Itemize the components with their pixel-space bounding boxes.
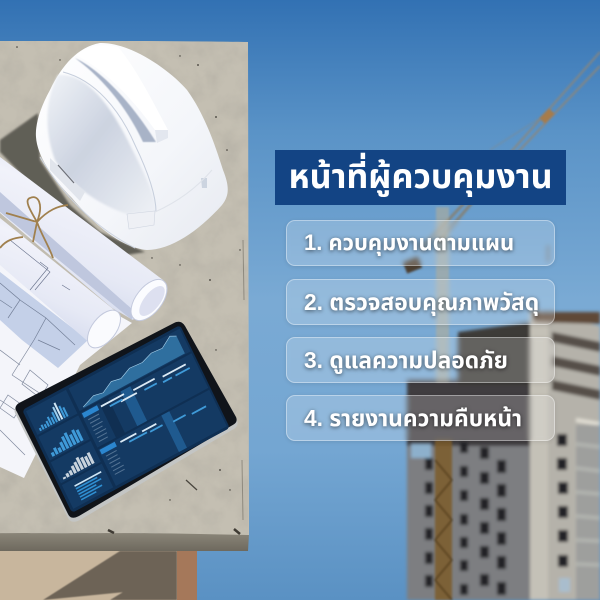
tower crane mast <box>435 207 452 600</box>
wall shadow <box>43 551 177 600</box>
card: item 3: 3. ดูแลความปลอดภัย <box>304 347 508 373</box>
wooden post <box>177 549 197 600</box>
building <box>407 207 600 600</box>
tablet screen dashboard <box>22 325 230 513</box>
twine bow <box>0 197 68 258</box>
tablet <box>15 322 238 522</box>
title banner: หน้าที่ผู้ควบคุมงาน <box>288 158 553 196</box>
card: item 2: 2. ตรวจสอบคุณภาพวัสดุ <box>304 289 539 315</box>
concrete slab top <box>0 41 249 535</box>
horizontal bars <box>74 471 102 500</box>
gantt bars <box>100 364 186 443</box>
card: item 2 <box>286 279 555 325</box>
rolled blueprint 1 <box>0 157 174 327</box>
card: item 4 <box>286 395 555 441</box>
wall below slab <box>0 548 178 600</box>
rolled blueprint 2 <box>0 218 127 354</box>
card: item 3 <box>286 337 555 383</box>
helmet shadow on concrete <box>0 113 145 256</box>
flat blueprint sheet <box>0 250 132 478</box>
card: item 4: 4. รายงานความคืบหน้า <box>304 405 522 431</box>
area chart <box>83 336 185 408</box>
title banner <box>275 150 566 205</box>
concrete slab front face <box>0 530 249 551</box>
card: item 1 <box>286 220 555 266</box>
white hard hat <box>36 43 228 250</box>
card: item 1: 1. ควบคุมงานตามแผน <box>304 230 514 255</box>
mini bar charts <box>26 329 227 509</box>
crane <box>405 52 600 268</box>
gantt headers <box>82 405 99 418</box>
